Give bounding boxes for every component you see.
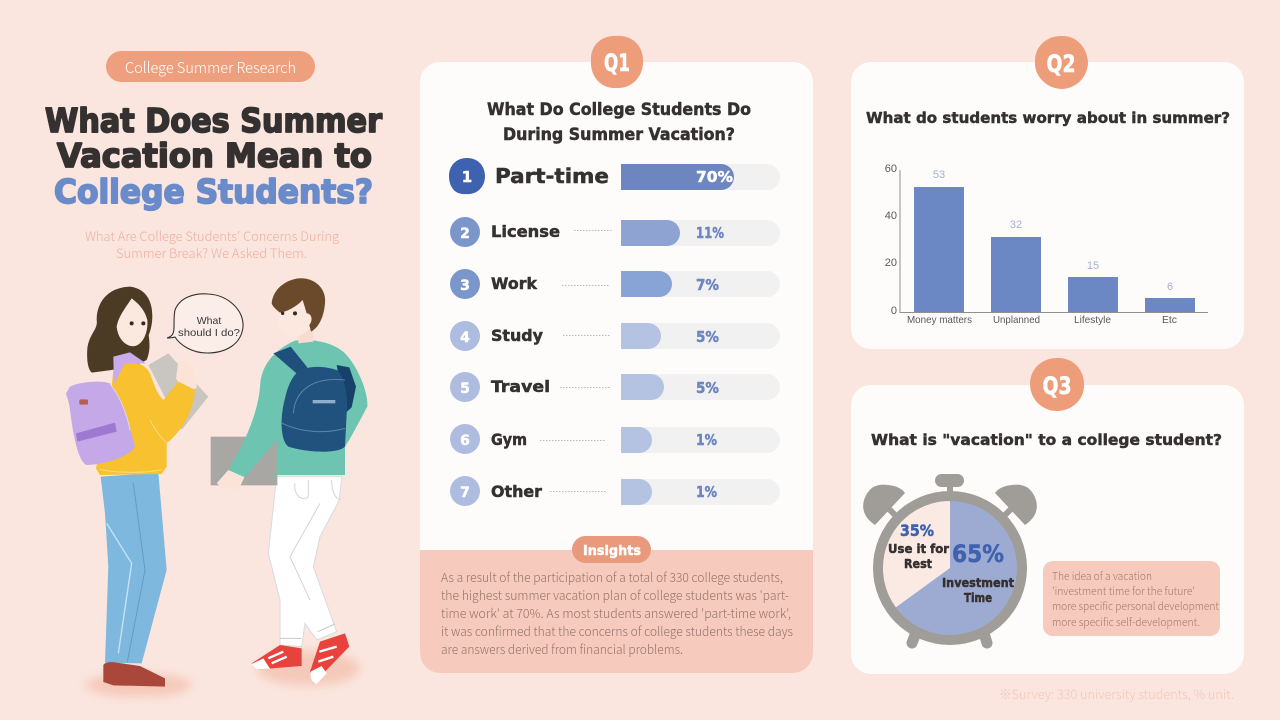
insights pill [572,536,651,563]
panel: Q3 [851,358,1244,674]
badge: Q1 [591,36,643,88]
pie labels: Investment [942,576,1014,590]
bar chart [885,163,1208,326]
ranked row 5: Travel: 5 [460,381,470,397]
ranked row 6: Gym: 1% [696,431,717,449]
ranked row 2: License: License [491,222,560,241]
pie labels: Time [964,591,992,605]
ranked row 2: License [450,217,780,247]
value labels: 6 [1167,281,1173,293]
ranked row 2: License: 11% [696,224,724,242]
callout [1043,561,1220,636]
subtitle [85,226,339,262]
insights text: As a result of the participation of a total of 330 college students, [441,567,783,586]
ranked row 1: Part-time: Part-time [495,164,609,188]
insights text: time work' at 70%. As most students answered 'part-time work', [441,603,791,622]
ranked row 5: Travel: 5% [696,379,719,397]
insights text [441,567,793,658]
ranked row 6: Gym: 6 [460,433,470,449]
alarm clock pie chart [863,474,1037,645]
insights band [420,536,813,673]
ranked row 4: Study [450,321,780,351]
insights text: the highest summer vacation plan of college students was 'part- [441,585,789,604]
category labels: Unplanned [993,314,1040,326]
pie labels: Use it for [888,542,949,556]
heading [487,100,751,144]
y axis labels [885,163,897,317]
ranked row 1: Part-time [449,158,780,194]
main title: College Students? [54,172,373,211]
value labels [933,169,1173,293]
main title: Vacation Mean to [57,136,372,175]
left intro panel [45,51,383,697]
boy figure [211,278,367,684]
card background [420,62,813,673]
panel: Q2 [851,36,1244,349]
ranked row 3: Work [450,269,780,299]
pie labels: 35% [900,521,934,540]
footnote: ※Survey: 330 university students, % unit. [999,684,1234,703]
bars [914,187,1195,312]
callout: 'investment time for the future' [1052,583,1195,599]
ranked row 6: Gym [450,424,780,454]
y axis labels: 0 [891,305,897,317]
tag pill: College Summer Research: College Summer Research [125,57,296,78]
badge: Q2 [1035,36,1088,89]
ranked row 1: Part-time: 1 [462,168,472,186]
main title [45,101,383,211]
subtitle: Summer Break? We Asked Them. [116,243,307,262]
speech bubble: What [197,315,221,327]
insights pill: Insights [583,543,641,559]
girl figure [66,287,208,687]
ranked row 6: Gym: Gym [491,430,527,449]
main title: What Does Summer [45,101,383,140]
ranked row 7: Other: 1% [696,483,717,501]
subtitle: What Are College Students' Concerns During [85,226,339,245]
card background [851,385,1244,674]
badge: Q3: Q3 [1042,372,1072,400]
illustration: two students talking [66,278,367,697]
ranked row 3: Work: Work [491,274,537,293]
ranked row 4: Study: 5% [696,328,719,346]
card background [851,62,1244,349]
y axis labels: 60 [885,163,897,175]
speech bubble: should I do? [178,327,240,339]
clock body [863,474,1037,645]
ranked row 3: Work: 3 [460,278,470,294]
callout: more specific self-development. [1052,614,1200,630]
ranked row 7: Other [450,476,780,506]
heading: What do students worry about in summer? [866,109,1230,127]
ranked row 1: Part-time: 70% [696,168,733,186]
heading: What is "vacation" to a college student? [871,431,1222,449]
value labels: 53 [933,169,945,181]
ranked row 7: Other: Other [491,482,542,501]
category labels: Etc [1162,314,1177,326]
category labels: Money matters [907,314,972,326]
badge: Q1: Q1 [604,49,630,77]
pie labels: Rest [904,557,932,571]
pie labels [888,521,1014,605]
pie: 35% rest [883,501,950,607]
tag pill: College Summer Research [106,51,315,82]
badge: Q2: Q2 [1046,50,1076,78]
ranked row 5: Travel [450,372,780,402]
category labels [907,314,1177,326]
pie labels: 65% [952,540,1004,568]
speech bubble [167,294,243,353]
ranked row 5: Travel: Travel [491,377,550,396]
y axis labels: 20 [885,257,897,269]
callout: more specific personal development [1052,598,1219,614]
insights text: it was confirmed that the concerns of college students these days [441,621,793,640]
value labels: 15 [1087,260,1099,272]
heading: What Do College Students Do [487,100,751,119]
panel: Q1 [420,36,813,673]
y axis labels: 40 [885,210,897,222]
ranked row 4: Study: Study [491,326,544,345]
ground shadows [85,651,360,697]
badge: Q3 [1030,358,1084,411]
callout: The idea of a vacation [1052,568,1152,584]
heading: During Summer Vacation? [503,125,735,144]
ranked row 7: Other: 7 [460,485,470,501]
pie: 65% investment [883,501,1017,635]
ranked row 4: Study: 4 [460,330,470,346]
ranked row 3: Work: 7% [696,276,719,294]
ranked row 2: License: 2 [460,226,470,242]
insights text: are answers derived from financial problems. [441,639,683,658]
category labels: Lifestyle [1074,314,1111,326]
value labels: 32 [1010,219,1022,231]
